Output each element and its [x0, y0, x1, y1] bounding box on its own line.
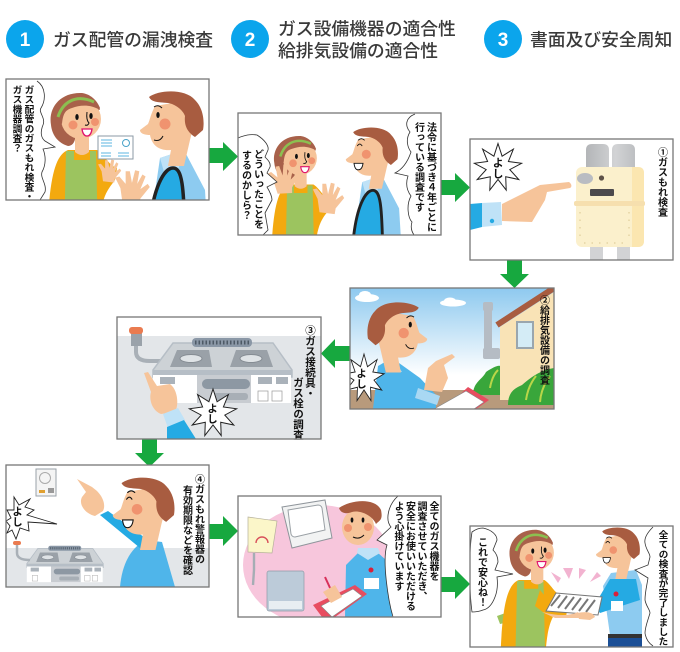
- arrow: panel 3 to 4: [500, 260, 529, 288]
- woman: [268, 136, 344, 234]
- man: [594, 528, 642, 647]
- stove: [153, 338, 292, 403]
- bubble text: [10, 85, 34, 201]
- speech bubble: [377, 496, 441, 617]
- bubble text: ガス機器調査？: [10, 85, 22, 153]
- arrow: panel 5 to 6: [135, 439, 164, 467]
- stove: [27, 546, 103, 582]
- caption: ①ガスもれ検査: [656, 147, 668, 217]
- panel 1: gas pipe inspection introduction: [5, 78, 210, 201]
- header: step 3: 書面及び安全周知: [530, 30, 672, 50]
- bubble text: 法令に基づき４年ごとに: [424, 121, 436, 232]
- bubble text: 安全にお使いいただける: [404, 500, 416, 611]
- gas tap and pipe: [129, 327, 160, 363]
- water heater: [248, 517, 277, 585]
- arrow: panel 6 to 7: [209, 516, 238, 546]
- speech bubbles: [470, 528, 513, 612]
- panel 2: explanation of legal inspection: [237, 112, 442, 236]
- burst label: よし: [11, 506, 23, 527]
- panel 7: all appliances inspected: [238, 496, 441, 625]
- woman: [49, 93, 117, 200]
- pointing hand and clipboard: [415, 354, 489, 409]
- speech bubble: [37, 81, 55, 200]
- caption: ③ガス接続具・: [304, 325, 316, 398]
- clouds: [355, 291, 466, 306]
- header: step 3: 3: [498, 30, 508, 51]
- arrow: panel 4 to 5: [321, 339, 350, 368]
- man: [77, 478, 175, 587]
- burst: good: [474, 144, 522, 190]
- inspector: [339, 501, 392, 617]
- caption: ②給排気設備の調査: [538, 295, 550, 385]
- panel 8: inspection completed: [470, 526, 673, 652]
- arrow: panel 2 to 3: [441, 173, 470, 202]
- bubble text: するのかしら？: [240, 150, 252, 220]
- bubble text: 行っている調査です: [412, 121, 424, 212]
- bubble text: 全ての検査が完了しました: [656, 529, 668, 646]
- header: step 2: 給排気設備の適合性: [278, 41, 438, 61]
- bubble text: ガス配管のガスもれ検査・: [22, 85, 34, 201]
- bubble text: [476, 529, 668, 646]
- caption: [292, 325, 316, 440]
- gas tap: [13, 541, 30, 560]
- bubble text: よう心掛けています: [392, 501, 404, 591]
- flue pipe: [483, 302, 500, 359]
- pointing hand: [470, 182, 571, 230]
- man: [116, 91, 206, 200]
- bubble text: 調査させていただき、: [415, 501, 427, 601]
- man: [346, 128, 401, 234]
- burst label: よし: [491, 157, 503, 179]
- burst with tail: [6, 497, 57, 539]
- header: step 2: ガス設備機器の適合性: [278, 19, 456, 39]
- gas meter: [574, 144, 645, 260]
- house: [497, 288, 554, 400]
- burst label: よし: [206, 403, 218, 424]
- fan heater: [267, 571, 304, 611]
- inspection card: [98, 136, 133, 183]
- header: step 2: [231, 19, 456, 61]
- pink background: [243, 505, 386, 616]
- speech bubbles: [238, 135, 277, 235]
- bubble text: 全てのガス機器を: [427, 500, 439, 581]
- header: step 3: [484, 20, 672, 58]
- man: [367, 302, 436, 409]
- arrow: panel 7 to 8: [441, 569, 470, 599]
- panel 3: gas leak inspection at meter: [470, 139, 673, 260]
- header: step 2: 2: [245, 30, 255, 51]
- bubble text: [392, 500, 439, 611]
- burst: good: [344, 354, 384, 401]
- dryer: [282, 500, 332, 548]
- pink accent marks: [551, 568, 601, 583]
- header: step 1: ガス配管の漏洩検査: [53, 30, 213, 50]
- burst: good: [189, 389, 237, 436]
- clipboard: [313, 577, 367, 617]
- arrow: panel 1 to 2: [209, 142, 238, 171]
- handed document: [542, 593, 602, 620]
- bubble text: これで安心ね！: [476, 537, 488, 607]
- header: step 1: 1: [20, 30, 31, 51]
- woman: [497, 530, 567, 652]
- burst label: よし: [355, 368, 367, 389]
- ground: [350, 390, 554, 409]
- panel 5: gas connector and stopcock inspection: [117, 317, 321, 440]
- caption: 有効期限などを確認: [180, 484, 192, 576]
- caption: [180, 474, 204, 576]
- caption: ガス栓の調査: [292, 377, 304, 440]
- bushes: [473, 366, 554, 405]
- gas alarm: [36, 469, 56, 496]
- bubble text: どういったことを: [252, 148, 264, 229]
- bubble text: [240, 121, 436, 232]
- panel 4: flue equipment inspection: [344, 288, 554, 409]
- header: step 1: [6, 20, 213, 58]
- panel 6: gas alarm expiry check: [6, 465, 209, 587]
- pointing hand: [144, 372, 196, 439]
- caption: ④ガスもれ警報器の: [192, 474, 204, 564]
